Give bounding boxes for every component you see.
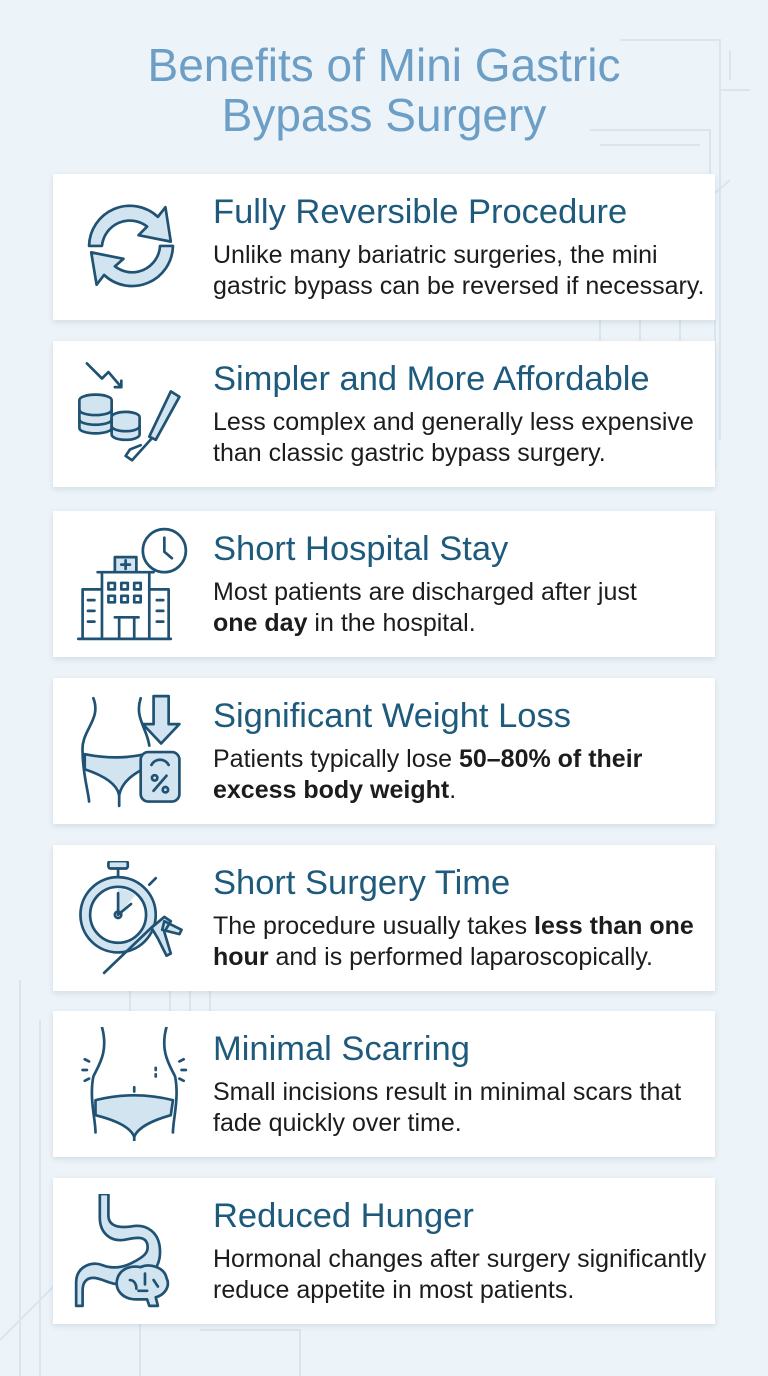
icon: stomach and brain xyxy=(74,1194,170,1308)
panel: hospital stay: Short Hospital Stay xyxy=(213,530,508,568)
panel: reduced hunger: Hormonal changes after surgery significantly xyxy=(213,1245,706,1273)
icon: coins and scalpel xyxy=(78,362,181,462)
panel: affordable: than classic gastric bypass surgery. xyxy=(213,439,606,467)
panel: surgery time: Short Surgery Time xyxy=(213,864,510,902)
title: Bypass Surgery xyxy=(222,89,546,141)
panel: hospital stay: Most patients are discharged after just xyxy=(213,578,637,606)
panel: hospital stay: one day in the hospital. xyxy=(213,609,476,637)
title xyxy=(148,39,620,141)
panel: reduced hunger: Reduced Hunger xyxy=(213,1197,474,1235)
icon: body with arrow and scale xyxy=(81,694,181,808)
panel: scarring: Small incisions result in minimal scars that xyxy=(213,1078,681,1106)
panel: hospital stay xyxy=(53,511,715,657)
panel: weight loss: Patients typically lose 50–80% of their xyxy=(213,745,642,773)
panel: weight loss: excess body weight. xyxy=(213,776,456,804)
title: Benefits of Mini Gastric xyxy=(148,39,620,91)
panel: affordable: Less complex and generally less expensive xyxy=(213,408,694,436)
panel: scarring: Minimal Scarring xyxy=(213,1030,470,1068)
icon: stopwatch with laparoscopic tool xyxy=(79,861,183,974)
panel: affordable xyxy=(53,341,715,487)
panel: affordable: Simpler and More Affordable xyxy=(213,360,650,398)
panel: weight loss: Significant Weight Loss xyxy=(213,697,571,735)
panel: surgery time xyxy=(53,845,715,991)
panel: scarring: fade quickly over time. xyxy=(213,1109,462,1137)
panel: reduced hunger xyxy=(53,1178,715,1324)
panel: reversible xyxy=(53,174,715,320)
panel: scarring xyxy=(53,1011,715,1157)
icon: torso with small scars xyxy=(81,1027,188,1141)
panel: reversible: Unlike many bariatric surgeries, the mini xyxy=(213,241,658,269)
panel: surgery time: The procedure usually takes less than one xyxy=(213,912,694,940)
panel: reversible: Fully Reversible Procedure xyxy=(213,193,627,231)
icon: hospital with clock xyxy=(76,528,188,640)
panel: reduced hunger: reduce appetite in most patients. xyxy=(213,1276,574,1304)
panel: reversible: gastric bypass can be reversed if necessary. xyxy=(213,272,704,300)
panel: surgery time: hour and is performed laparoscopically. xyxy=(213,943,653,971)
icon: circular arrows xyxy=(88,204,174,288)
panel: weight loss xyxy=(53,678,715,824)
